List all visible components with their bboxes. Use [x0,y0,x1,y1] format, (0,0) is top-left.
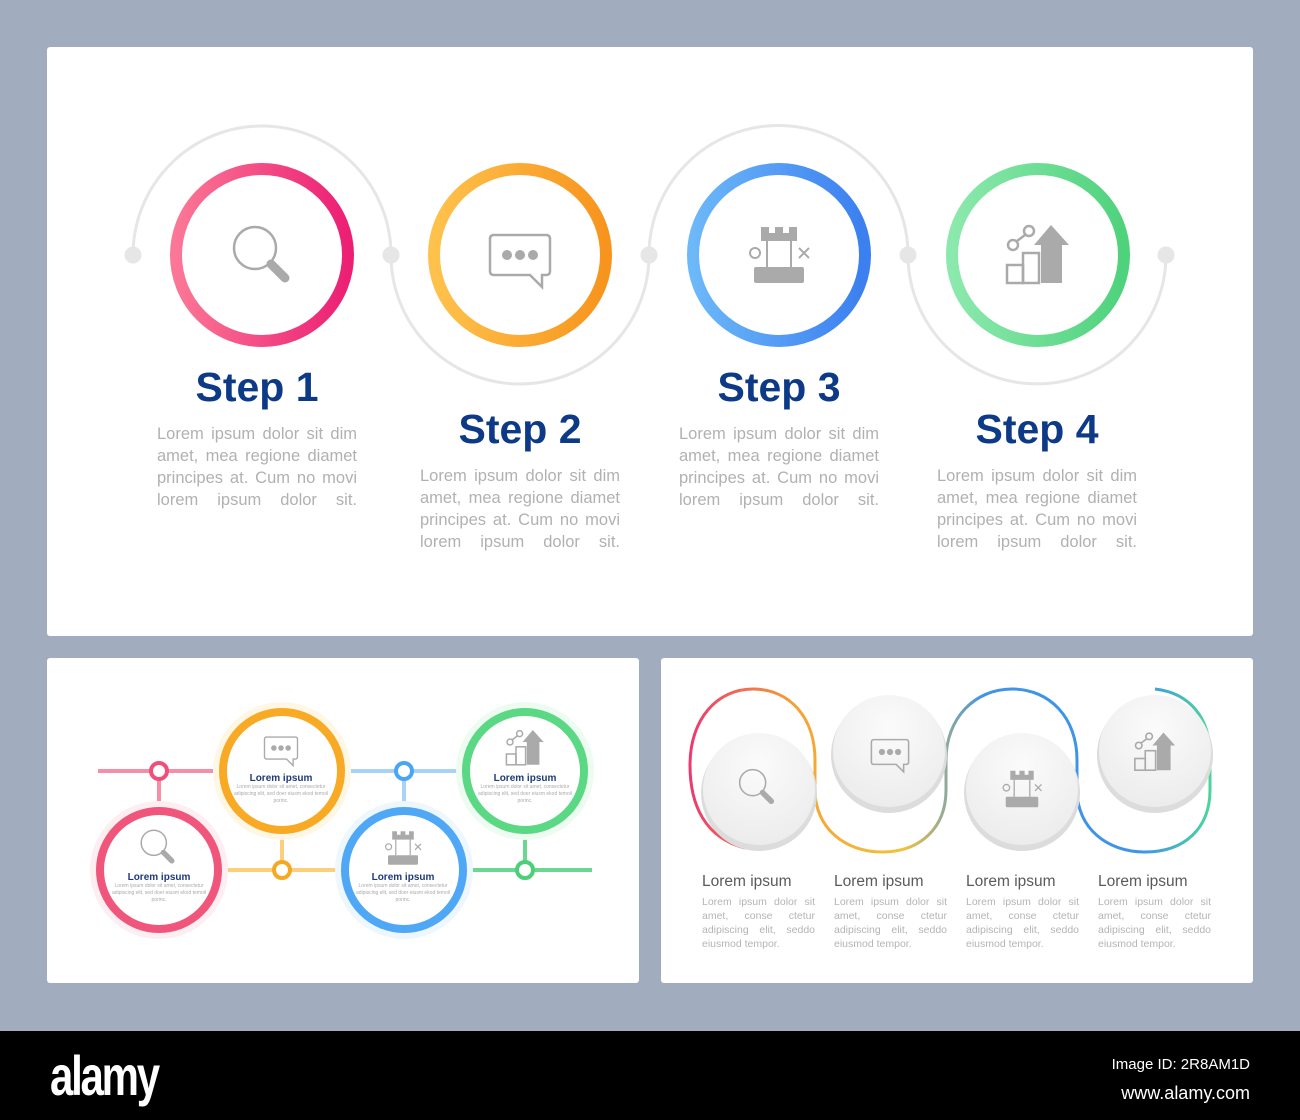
panel: bottom left [47,658,639,983]
text: step 4: Lorem ipsum dolor sit dim amet, mea regione diamet principes at. Cum no movi lorem ipsum dolor sit. [937,467,1137,551]
bottom-right text 4: Lorem ipsum [1098,873,1188,890]
text: step 1: Lorem ipsum dolor sit dim amet, mea regione diamet principes at. Cum no movi lorem ipsum dolor sit. [157,425,357,509]
circle text: orange: Lorem ipsum [250,773,312,784]
circle text: pink [112,872,206,903]
bottom-right text 3: Lorem ipsum dolor sit amet, conse ctetur adipiscing elit, seddo eiusmod tempor. [966,896,1079,950]
heading: Step 1: Step 1 [195,364,319,410]
heading: Step 3: Step 3 [717,364,841,410]
circle text: blue: Lorem ipsum dolor sit amet, consectetur adipiscing elit, sed doer eiusm ekod temoil porinc. [356,883,450,903]
circle text: green [478,773,572,804]
bottom-right discs [701,695,1213,851]
circle text: orange: Lorem ipsum dolor sit amet, consectetur adipiscing elit, sed doer eiusm ekod temoil porinc. [234,784,328,804]
footer bar [0,1031,1300,1120]
circle text: pink: Lorem ipsum [128,872,190,883]
connector: grey arcs [126,125,1173,384]
circle text: blue [356,872,450,903]
bottom-right text 1: Lorem ipsum [702,873,792,890]
bottom-left circles [90,702,594,939]
image id: www.alamy.com [1121,1083,1250,1103]
step 3 ring with strategy icon [693,169,865,341]
panel: bottom right [661,658,1253,983]
step 2 ring with chat icon [434,169,606,341]
panel: top steps [47,47,1253,636]
circle text: green: Lorem ipsum dolor sit amet, consectetur adipiscing elit, sed doer eiusm ekod temoil porinc. [478,784,572,804]
bottom-left nodes [151,763,533,878]
bottom-right text 1: Lorem ipsum dolor sit amet, conse ctetur adipiscing elit, seddo eiusmod tempor. [702,896,815,950]
logo: alamy: alamy [50,1044,158,1107]
heading: Step 4: Step 4 [975,406,1099,452]
text: step 3: Lorem ipsum dolor sit dim amet, mea regione diamet principes at. Cum no movi lorem ipsum dolor sit. [679,425,879,509]
heading: Step 2: Step 2 [458,406,582,452]
text: step 2: Lorem ipsum dolor sit dim amet, mea regione diamet principes at. Cum no movi lorem ipsum dolor sit. [420,467,620,551]
image id [1112,1056,1250,1103]
circle text: pink: Lorem ipsum dolor sit amet, consectetur adipiscing elit, sed doer eiusm ekod temoil porinc. [112,883,206,903]
bottom-right wave line [690,689,1210,852]
circle text: blue: Lorem ipsum [372,872,434,883]
bottom-right text 2: Lorem ipsum dolor sit amet, conse ctetur adipiscing elit, seddo eiusmod tempor. [834,896,947,950]
small icons bottom-left [141,830,172,861]
image id: Image ID: 2R8AM1D [1112,1056,1250,1073]
bottom-right text 2: Lorem ipsum [834,873,924,890]
step 1 ring with search icon [176,169,348,341]
bottom-right text 3: Lorem ipsum [966,873,1056,890]
circle text: orange [234,773,328,804]
bottom-right text 4: Lorem ipsum dolor sit amet, conse ctetur adipiscing elit, seddo eiusmod tempor. [1098,896,1211,950]
bottom-left timeline lines [98,771,592,870]
step 4 ring with growth icon [952,169,1124,341]
circle text: green: Lorem ipsum [494,773,556,784]
